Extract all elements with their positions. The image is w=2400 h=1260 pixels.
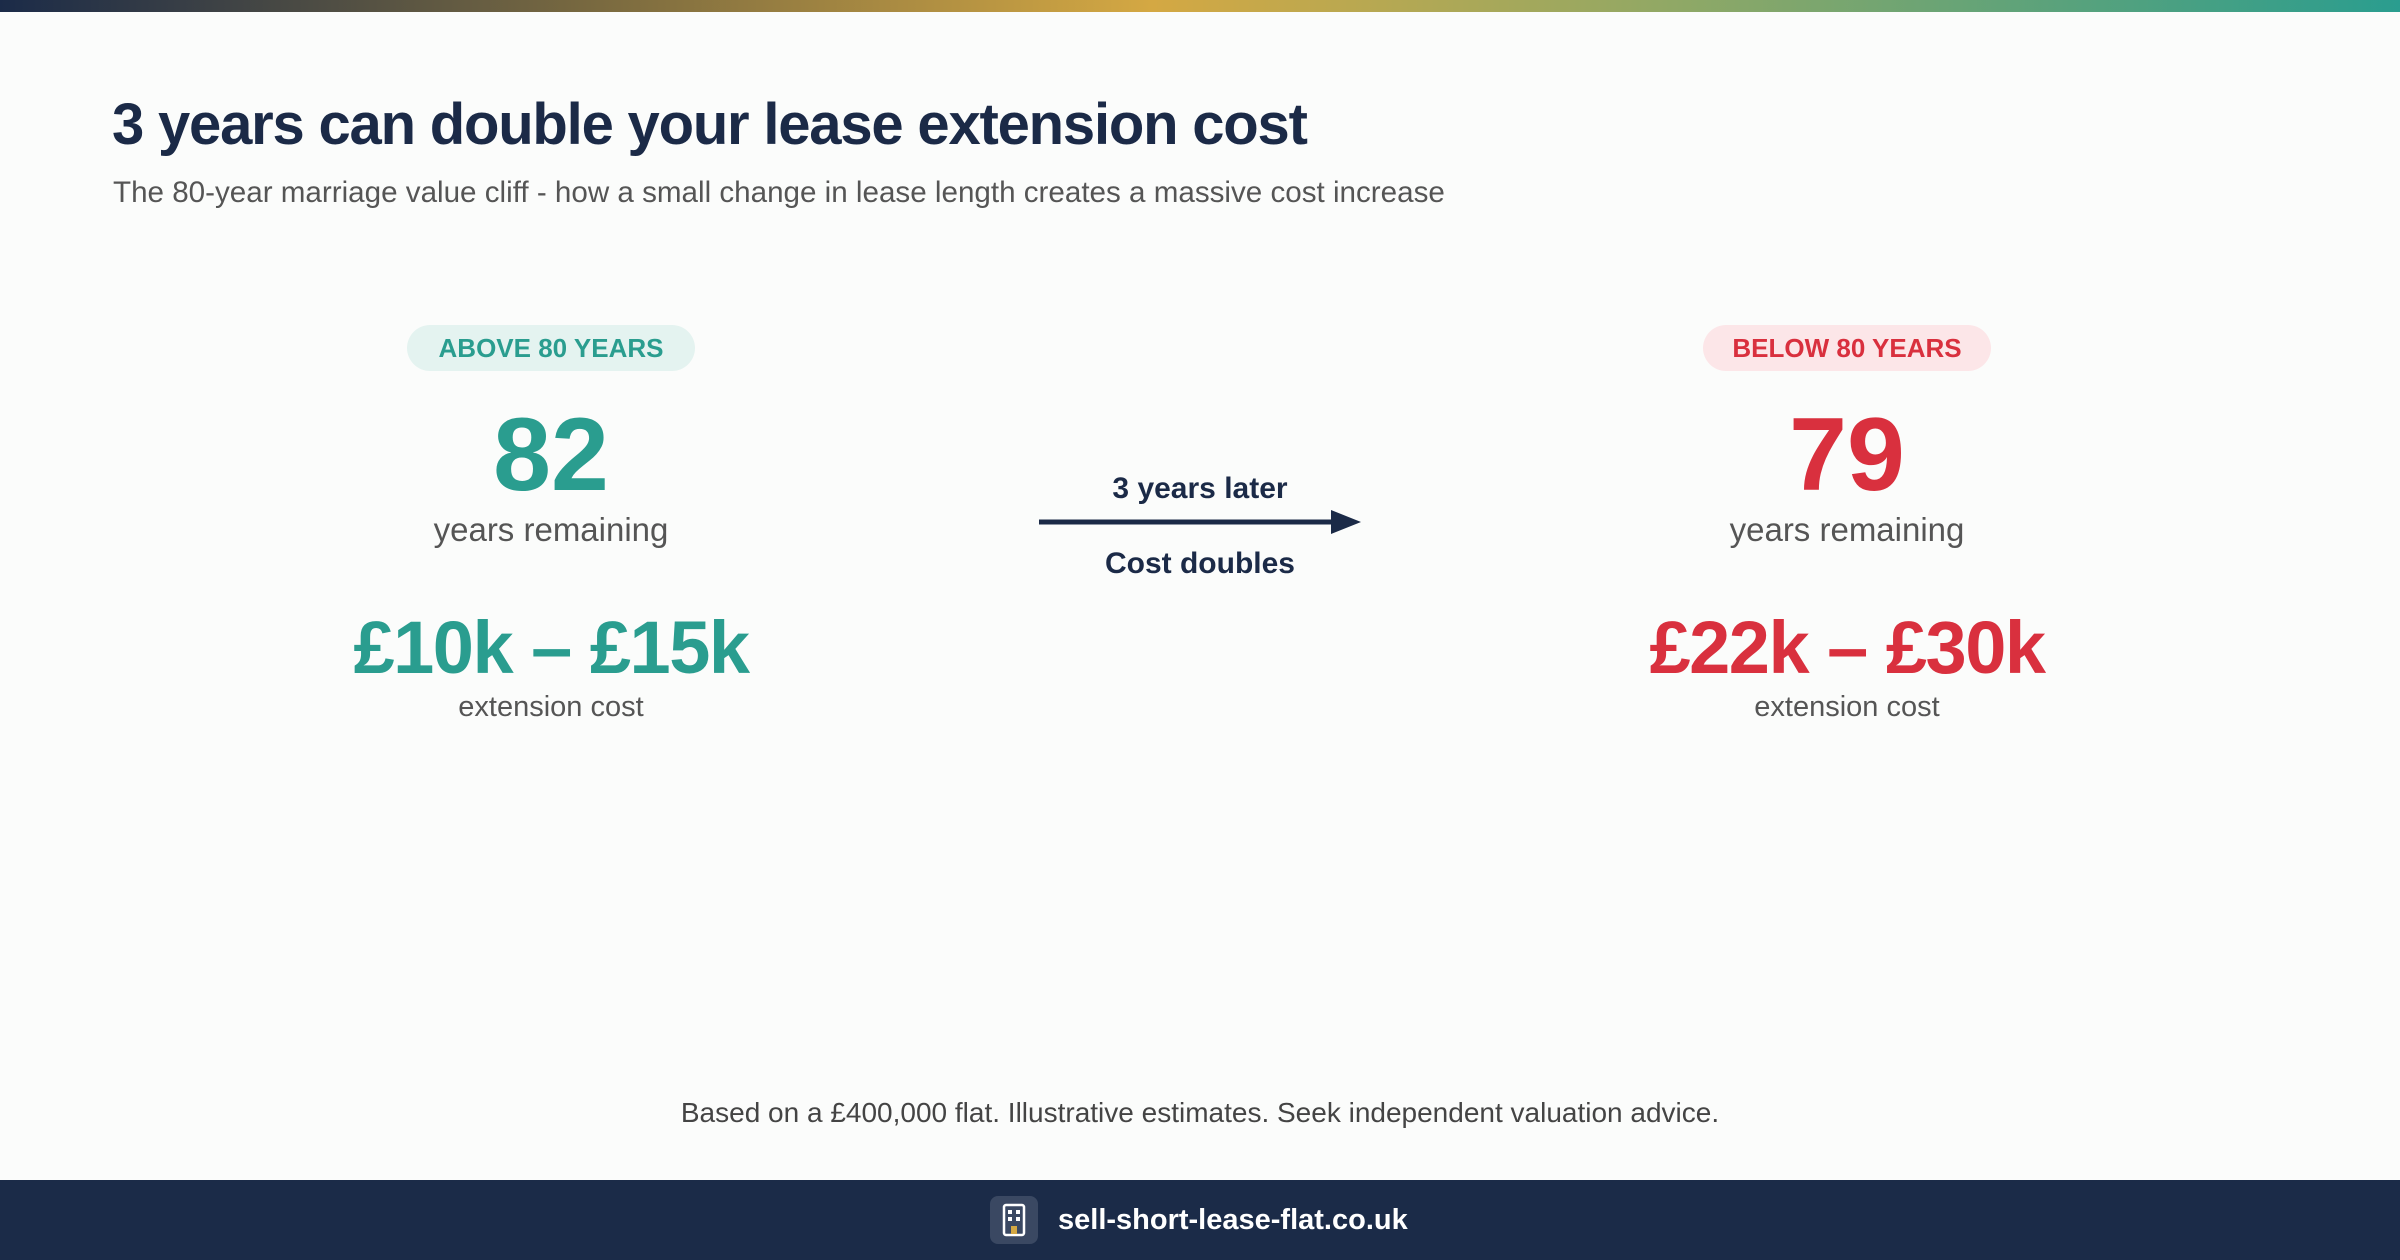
arrow label top: 3 years later — [1112, 472, 1288, 505]
cost range: £10k – £15k — [353, 606, 749, 689]
footnote: Based on a £400,000 flat. Illustrative estimates. Seek independent valuation advice. — [681, 1097, 1719, 1128]
footer url: sell-short-lease-flat.co.uk — [1058, 1204, 1408, 1236]
subtitle: The 80-year marriage value cliff - how a small change in lease length creates a massive cost increase — [113, 176, 1445, 209]
top gradient bar — [0, 0, 2400, 12]
cost range: £22k – £30k — [1649, 606, 2045, 689]
label extension cost: extension cost — [458, 691, 644, 723]
number 79: 79 — [1789, 397, 1905, 513]
icon: building — [990, 1196, 1038, 1244]
arrow line — [1039, 510, 1361, 534]
label years remaining: years remaining — [434, 511, 668, 548]
arrow: 3 years later — [1039, 472, 1361, 580]
panel: below 80 years — [1649, 325, 2046, 723]
panel: above 80 years — [353, 325, 750, 723]
arrow label bottom: Cost doubles — [1105, 547, 1295, 580]
pill: above 80 years: ABOVE 80 YEARS — [439, 333, 663, 363]
title: 3 years can double your lease extension cost — [112, 92, 1307, 157]
pill: below 80 years — [1703, 325, 1991, 371]
number 82: 82 — [493, 397, 609, 513]
label extension cost: extension cost — [1754, 691, 1940, 723]
footer — [0, 1180, 2400, 1260]
pill: above 80 years — [407, 325, 695, 371]
pill: below 80 years: BELOW 80 YEARS — [1732, 333, 1962, 363]
label years remaining: years remaining — [1730, 511, 1964, 548]
